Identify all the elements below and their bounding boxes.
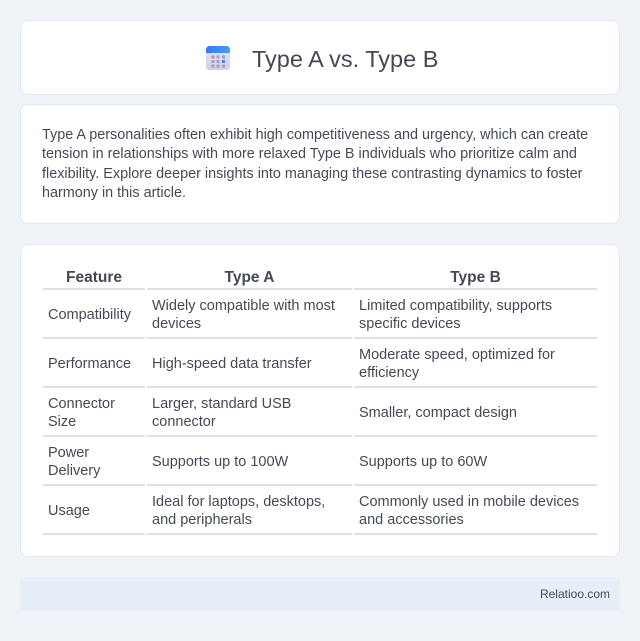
row: Connector Size: Connector	[48, 396, 115, 412]
Connector Size Type A	[152, 396, 291, 430]
intro text: flexibility. Explore deeper insights into managing these contrasting dynamics to foster	[42, 166, 582, 182]
Connector Size Type A: connector	[152, 414, 216, 430]
table header: Type B: Type B	[450, 269, 501, 286]
Usage Type A: and peripherals	[152, 512, 252, 528]
table header: Type A: Type A	[225, 269, 274, 286]
Performance Type B	[359, 347, 555, 381]
Performance Type B: efficiency	[359, 365, 419, 381]
Usage Type A: Ideal for laptops, desktops,	[152, 494, 325, 510]
Usage Type A	[152, 494, 325, 528]
Compatibility Type A	[152, 298, 335, 332]
panel: comparison table	[20, 244, 620, 557]
panel: title card	[20, 20, 620, 95]
Performance Type B: Moderate speed, optimized for	[359, 347, 555, 363]
Performance Type A: High-speed data transfer	[152, 356, 312, 372]
Compatibility Type B	[359, 298, 552, 332]
Compatibility Type A: devices	[152, 316, 201, 332]
footer bar	[20, 577, 620, 611]
row: Performance: Performance	[48, 356, 131, 372]
row: Compatibility: Compatibility	[48, 307, 131, 323]
intro text: Type A personalities often exhibit high competitiveness and urgency, which can create	[42, 127, 588, 143]
row: Power Delivery: Power	[48, 445, 89, 461]
Compatibility Type A: Widely compatible with most	[152, 298, 335, 314]
footer text: Relatioo.com: Relatioo.com	[540, 587, 610, 601]
Power Delivery Type A: Supports up to 100W	[152, 454, 288, 470]
intro text: tension in relationships with more relaxed Type B individuals who prioritize calm and	[42, 146, 577, 162]
Usage Type B	[359, 494, 579, 528]
intro text: harmony in this article.	[42, 185, 186, 201]
Usage Type B: Commonly used in mobile devices	[359, 494, 579, 510]
Connector Size Type A: Larger, standard USB	[152, 396, 291, 412]
intro text	[42, 127, 588, 201]
row: Connector Size	[48, 396, 115, 430]
Power Delivery Type B: Supports up to 60W	[359, 454, 487, 470]
Connector Size Type B: Smaller, compact design	[359, 405, 517, 421]
Usage Type B: and accessories	[359, 512, 464, 528]
table header: Feature: Feature	[66, 269, 122, 286]
row: Connector Size: Size	[48, 414, 76, 430]
Compatibility Type B: Limited compatibility, supports	[359, 298, 552, 314]
row: Power Delivery: Delivery	[48, 463, 100, 479]
row: Usage: Usage	[48, 503, 90, 519]
title: Type A vs. Type B	[252, 46, 438, 72]
row: Power Delivery	[48, 445, 100, 479]
panel: introduction	[20, 104, 620, 224]
icon: calendar	[206, 46, 230, 70]
Compatibility Type B: specific devices	[359, 316, 461, 332]
